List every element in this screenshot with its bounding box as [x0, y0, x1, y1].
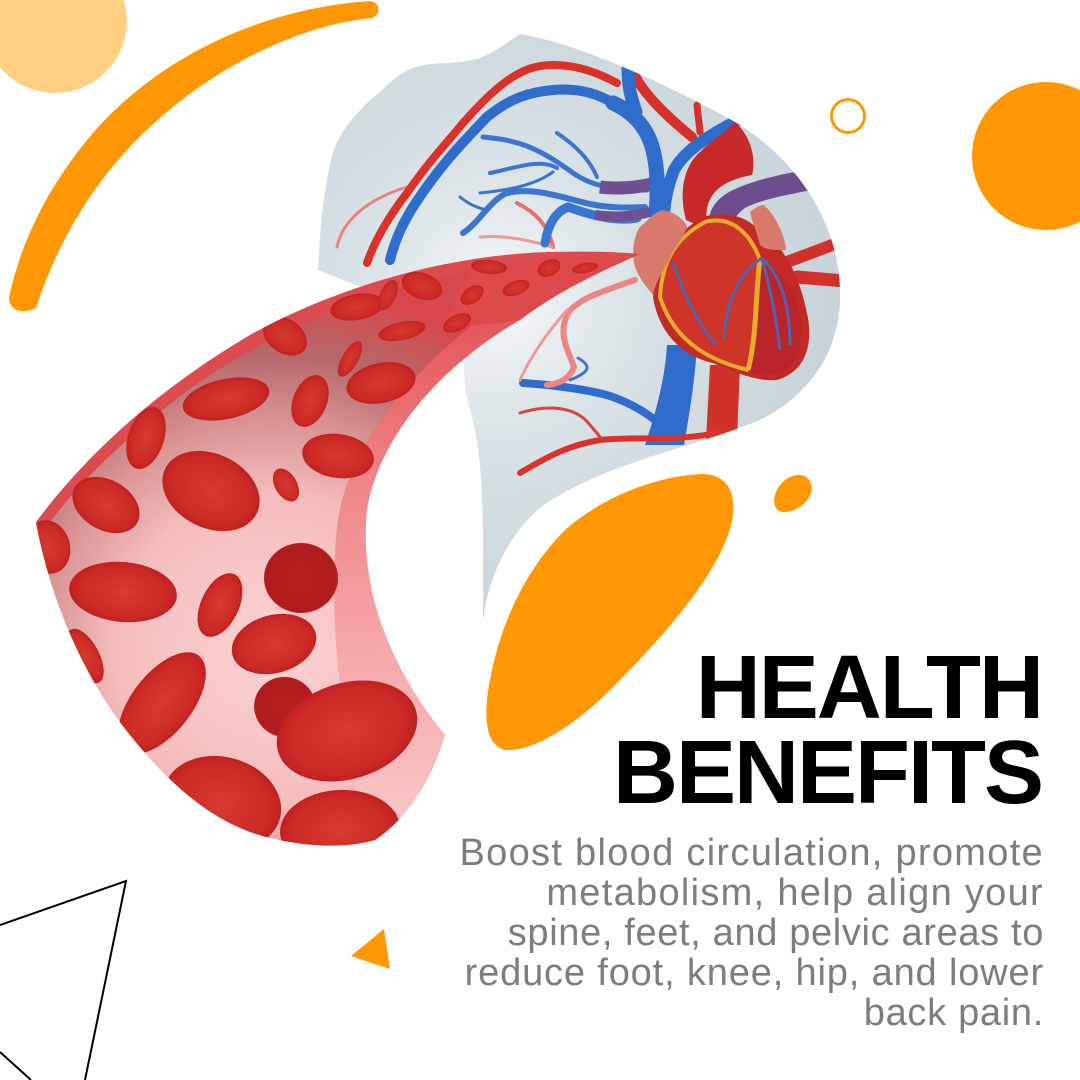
blood vessel with red cells	[36, 252, 640, 846]
body text: Boost blood circulation, promote	[460, 832, 1044, 874]
body text: back pain.	[864, 992, 1044, 1034]
title: HEALTH	[696, 638, 1042, 738]
thin red and blue branches, left	[337, 133, 647, 247]
body text	[460, 832, 1044, 1034]
illustration: body silhouette with arteries and heart	[318, 34, 840, 620]
black outline triangle	[0, 881, 126, 1080]
orange arc: top left	[9, 1, 379, 311]
orange leaf blob	[486, 474, 733, 750]
main upper arteries	[367, 65, 735, 263]
red blood cells	[20, 256, 599, 873]
body text: spine, feet, and pelvic areas to	[508, 912, 1044, 954]
decorative circle: top left	[0, 0, 127, 93]
body text: reduce foot, knee, hip, and lower	[465, 952, 1044, 994]
small orange blob	[774, 475, 812, 512]
small orange triangle	[351, 929, 390, 969]
purple pulmonary vessel	[709, 172, 808, 216]
aortic arch	[683, 122, 753, 230]
right atrium	[633, 210, 687, 295]
right wall band	[334, 254, 640, 860]
body text: metabolism, help align your	[546, 872, 1044, 914]
right tip	[472, 254, 638, 326]
title: BENEFITS	[613, 723, 1042, 823]
body silhouette	[318, 34, 840, 620]
outline circle	[832, 100, 864, 132]
upper wall strip	[36, 252, 549, 522]
left atrium	[750, 205, 786, 250]
descending aorta	[706, 365, 740, 440]
heart	[633, 205, 809, 380]
purple vessel joints	[595, 184, 652, 216]
vessel interior	[30, 240, 650, 860]
blue vena cava	[645, 345, 697, 445]
orange circle: right	[972, 82, 1080, 230]
title	[613, 638, 1042, 823]
lower branches	[517, 239, 840, 476]
